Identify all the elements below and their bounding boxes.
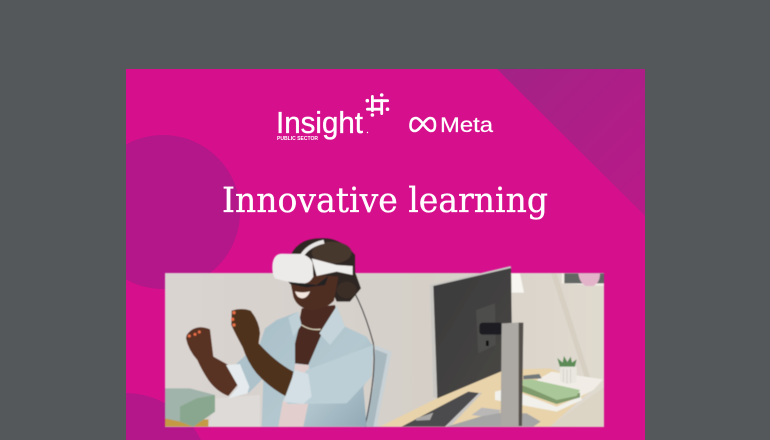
Meta logo [410,114,493,137]
Meta logo: Meta [440,114,493,137]
VR side strap [312,258,353,276]
title: Innovative learning [222,181,548,221]
lamp arm [551,273,592,383]
left collar [288,312,302,337]
monitor [430,266,512,398]
headset cable [340,272,374,427]
woman [165,238,392,427]
face [291,275,338,310]
shirt body [259,306,373,427]
white sheet on desk [537,372,603,397]
lamp shade [512,273,524,293]
raised forearm and hand [231,309,293,398]
shirt cuff [226,364,249,398]
necklace [302,325,321,330]
VR headset body [272,254,313,283]
desk side [550,387,604,427]
undershirt [278,364,309,427]
chair [363,345,392,427]
right collar [319,306,345,345]
VR top strap [302,242,324,256]
Insight Public Sector logo: Insight [276,105,363,140]
desk [380,368,597,427]
sleeve cuff [283,370,312,404]
Insight Public Sector logo [276,93,389,142]
other forearm and hand [186,327,239,396]
left sleeve [236,345,263,393]
neck and chest [295,305,337,365]
hair [292,238,361,302]
potted plant [557,356,577,384]
decorative lower circle [126,393,201,440]
smile [295,291,310,298]
right sleeve [287,345,373,404]
pink panel [126,69,645,440]
decorative triangle [497,69,645,216]
stack of books [495,374,582,412]
infinity icon [410,118,435,131]
VR gasket [288,276,328,287]
monitor stand [501,323,523,426]
keyboard [402,392,482,427]
window with vase [562,273,604,286]
photo: woman using VR headset at desk [165,238,604,427]
logo mark [366,93,389,117]
monitor stand base [447,413,541,427]
blurred items on table [208,395,260,427]
Insight Public Sector logo: PUBLIC SECTOR [277,136,318,142]
numeric keypad [472,408,501,418]
fingernails on other hand [188,330,201,337]
decorative circle [126,135,240,289]
blanket and basket [165,388,215,427]
right side of photo [380,266,604,427]
fingernails on raised hand [231,311,236,327]
wall [165,273,604,427]
